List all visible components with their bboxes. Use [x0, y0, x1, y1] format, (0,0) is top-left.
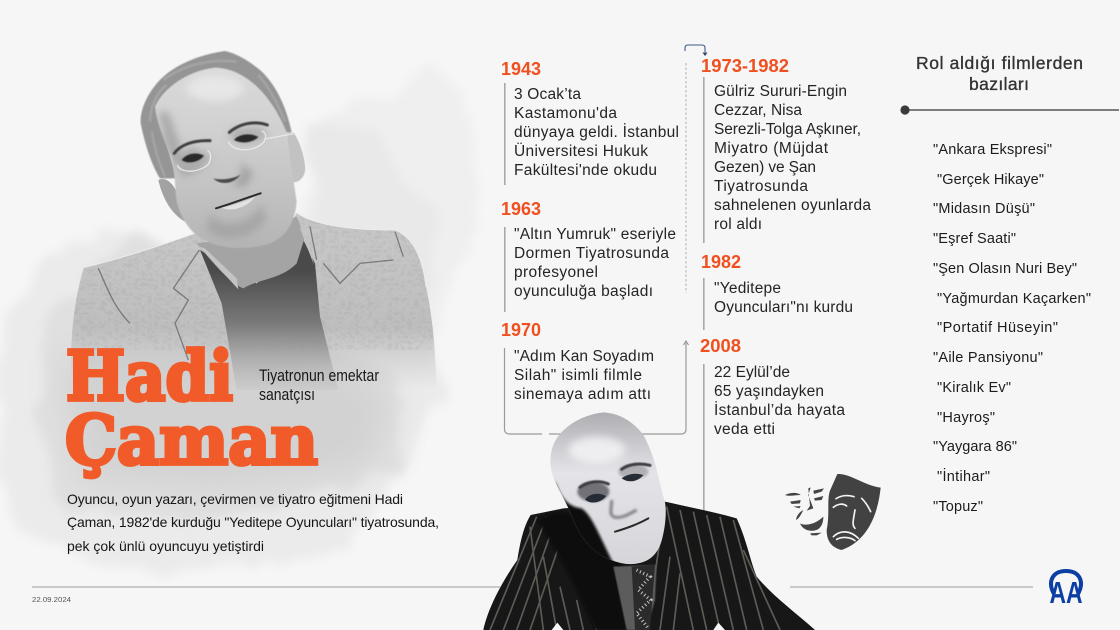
film list: "Portatif Hüseyin" — [937, 320, 1058, 336]
film list: "Ankara Ekspresi" — [933, 142, 1052, 158]
timeline column 1 — [501, 59, 679, 403]
jacket texture — [70, 217, 440, 350]
entry: 1970 — [501, 320, 654, 403]
eyebrows — [174, 123, 267, 153]
entry: 1973-1982 — [701, 56, 871, 243]
facial shading — [158, 112, 268, 238]
date: 22.09.2024 — [32, 595, 71, 604]
entry: 1970: Silah" isimli filmle — [514, 367, 642, 384]
hair — [141, 51, 292, 178]
logo: Anadolu Agency — [1050, 571, 1082, 610]
entry: 2008: 65 yaşındayken — [714, 383, 824, 400]
entry: 1973-1982: 1973-1982 — [701, 56, 789, 76]
entry: 1943: Kastamonu'da — [514, 105, 617, 122]
entry: 1973-1982: Gülriz Sururi-Engin — [714, 83, 847, 100]
entry: 1973-1982: Gezen) ve Şan — [714, 159, 816, 176]
entry: 1943: 3 Ocak’ta — [514, 86, 581, 103]
forehead highlight — [187, 76, 243, 101]
entry: 2008: veda etti — [714, 421, 775, 438]
entry: 1982: "Yeditepe — [714, 280, 781, 297]
facial shadow — [555, 464, 648, 567]
film list — [933, 142, 1091, 515]
subtitle — [259, 367, 379, 404]
glasses — [177, 131, 293, 171]
entry: 1973-1982: rol aldı — [714, 216, 762, 233]
icon: theatre masks — [785, 474, 881, 550]
sweater — [200, 237, 338, 390]
body — [70, 213, 440, 390]
films heading: Rol aldığı filmlerden — [916, 53, 1083, 73]
eyes — [182, 134, 258, 162]
watercolor stain behind portrait — [0, 62, 480, 575]
entry: 1963: Dormen Tiyatrosunda — [514, 245, 669, 262]
timeline column 2 — [700, 56, 871, 512]
tie — [632, 565, 655, 630]
portrait: Hadi Çaman, upper photo — [70, 51, 440, 390]
neck and shirt collar — [197, 217, 305, 288]
hair strands — [150, 61, 285, 177]
entry: 1963: 1963 — [501, 199, 541, 219]
description: pek çok ünlü oyuncuyu yetiştirdi — [67, 538, 264, 554]
entry: 1973-1982: Serezli-Tolga Aşkıner, — [714, 121, 861, 138]
forehead highlight — [568, 437, 625, 463]
subtitle: sanatçısı — [259, 386, 315, 404]
lapels and jacket creases — [98, 227, 403, 360]
films heading: bazıları — [969, 74, 1029, 94]
comedy mask — [785, 487, 824, 535]
jacket highlight edge — [84, 213, 426, 287]
name title — [65, 337, 318, 481]
entry: 1973-1982: Miyatro (Müjdat — [714, 140, 829, 157]
film list: "Şen Olasın Nuri Bey" — [933, 261, 1077, 277]
entry: 1970: 1970 — [501, 320, 541, 340]
mouth — [615, 518, 648, 532]
name title: Çaman — [65, 401, 318, 481]
entry: 1970: "Adım Kan Soyadım — [514, 348, 654, 365]
film list: "Eşref Saati" — [933, 231, 1016, 247]
entry: 1943 — [501, 59, 679, 185]
film list: "Yaygara 86" — [933, 439, 1017, 455]
entry: 1973-1982: sahnelenen oyunlarda — [714, 197, 871, 214]
entry: 1973-1982: Tiyatrosunda — [714, 178, 808, 195]
tragedy mask — [827, 474, 881, 550]
eyes and brows — [580, 464, 650, 487]
entry: 1943: Üniversitesi Hukuk — [514, 142, 648, 160]
right ear — [287, 132, 306, 182]
entry: 2008: İstanbul’da hayata — [714, 401, 845, 419]
jacket — [71, 213, 437, 390]
entry: 1943: dünyaya geldi. İstanbul — [514, 123, 679, 141]
film list: "Kiralık Ev" — [937, 380, 1011, 396]
entry: 1973-1982: Cezzar, Nisa — [714, 102, 802, 119]
entry: 1943: Fakültesi'nde okudu — [514, 162, 657, 179]
description — [67, 491, 439, 554]
timeline connector arrows — [504, 45, 708, 434]
entry: 2008: 22 Eylül’de — [714, 364, 790, 381]
head — [141, 51, 306, 248]
subtitle: Tiyatronun emektar — [259, 367, 379, 385]
portrait: Hadi Çaman, lower photo — [480, 412, 817, 630]
film list: "Midasın Düşü" — [933, 201, 1035, 217]
entry: 1963: oyunculuğa başladı — [514, 283, 653, 300]
nose — [213, 174, 241, 183]
film list: "Topuz" — [933, 499, 983, 515]
film list: "Hayroş" — [937, 410, 995, 426]
description: Oyuncu, oyun yazarı, çevirmen ve tiyatro eğitmeni Hadi — [67, 491, 403, 507]
entry: 1982: 1982 — [701, 252, 741, 272]
skin — [155, 68, 297, 248]
name title: Hadi — [66, 337, 233, 417]
film list: "Aile Pansiyonu" — [933, 350, 1043, 366]
films divider with dot — [900, 105, 1119, 115]
entry: 1963: "Altın Yumruk" eseriyle — [514, 226, 676, 243]
left ear — [158, 179, 185, 222]
logo: Anadolu Agency: AA — [1050, 575, 1082, 610]
entry: 2008: 2008 — [700, 336, 741, 356]
films heading — [916, 53, 1083, 94]
footer rules — [32, 586, 1033, 588]
shadow at collar — [537, 512, 627, 630]
entry: 1943: 1943 — [501, 59, 541, 79]
entry: 1982 — [701, 252, 853, 330]
shirt — [613, 565, 657, 630]
head — [550, 412, 666, 564]
entry: 1963: profesyonel — [514, 264, 598, 281]
entry: 1970: sinemaya adım attı — [514, 386, 651, 403]
mouth — [216, 193, 261, 208]
film list: "Yağmurdan Kaçarken" — [937, 291, 1091, 307]
nose — [611, 500, 637, 517]
film list: "Gerçek Hikaye" — [937, 172, 1044, 188]
entry: 2008 — [700, 336, 845, 512]
entry: 1963 — [501, 199, 676, 312]
description: Çaman, 1982'de kurduğu "Yeditepe Oyuncuları" tiyatrosunda, — [67, 514, 439, 530]
entry: 1982: Oyuncuları"nı kurdu — [714, 299, 853, 316]
film list: "İntihar" — [937, 467, 990, 485]
pinstripe suit — [480, 497, 817, 630]
